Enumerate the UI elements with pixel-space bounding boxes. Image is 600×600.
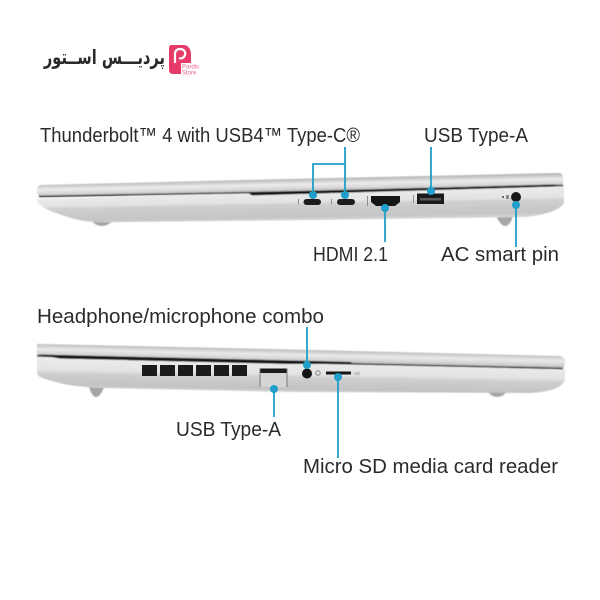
heading: USB Type-A label, top: USB Type-A [424, 124, 528, 147]
label: HDMI 2.1: HDMI 2.1 [313, 243, 388, 266]
label mark: SD: SD [354, 371, 361, 376]
callout dots: bottom [270, 361, 342, 393]
label: Micro SD media card reader: Micro SD media card reader [303, 456, 558, 478]
laptop: left side view [37, 344, 565, 397]
base [37, 186, 564, 222]
port marks [298, 195, 509, 206]
foot, left [89, 387, 104, 397]
port: USB-A [417, 194, 444, 204]
laptop: right side view [37, 173, 564, 226]
lid [37, 173, 563, 197]
foot, left [92, 221, 112, 226]
callout lines: bottom [274, 327, 338, 458]
logo icon: Pardis [182, 64, 199, 70]
icon: headphone mark [316, 371, 320, 375]
port: HDMI [371, 196, 400, 206]
logo icon: Store [182, 70, 197, 76]
foot, right [488, 392, 506, 397]
label: USB Type-A, bottom: USB Type-A [176, 418, 281, 441]
logo wordmark: پردیـــس اســتور [44, 45, 165, 69]
callout lines: top [313, 147, 516, 247]
port: headphone jack [302, 368, 312, 378]
vents [142, 365, 247, 376]
label: Headphone/microphone combo: Headphone/microphone combo [37, 306, 324, 328]
foot, right [496, 216, 513, 226]
port: USB-C 2 [337, 199, 355, 205]
base [37, 357, 565, 393]
callout dots: top [309, 187, 520, 212]
port: AC smart pin [511, 192, 521, 202]
lid [37, 344, 565, 368]
port: micro SD [326, 372, 351, 374]
seam [37, 356, 563, 368]
logo icon [169, 45, 202, 76]
seam [39, 186, 563, 196]
port: USB-C 1 [304, 199, 321, 205]
port: USB-A, left side [260, 368, 287, 387]
heading: Thunderbolt label: Thunderbolt™ 4 with USB4™ Type-C® [40, 124, 360, 147]
label: AC smart pin: AC smart pin [441, 243, 559, 266]
